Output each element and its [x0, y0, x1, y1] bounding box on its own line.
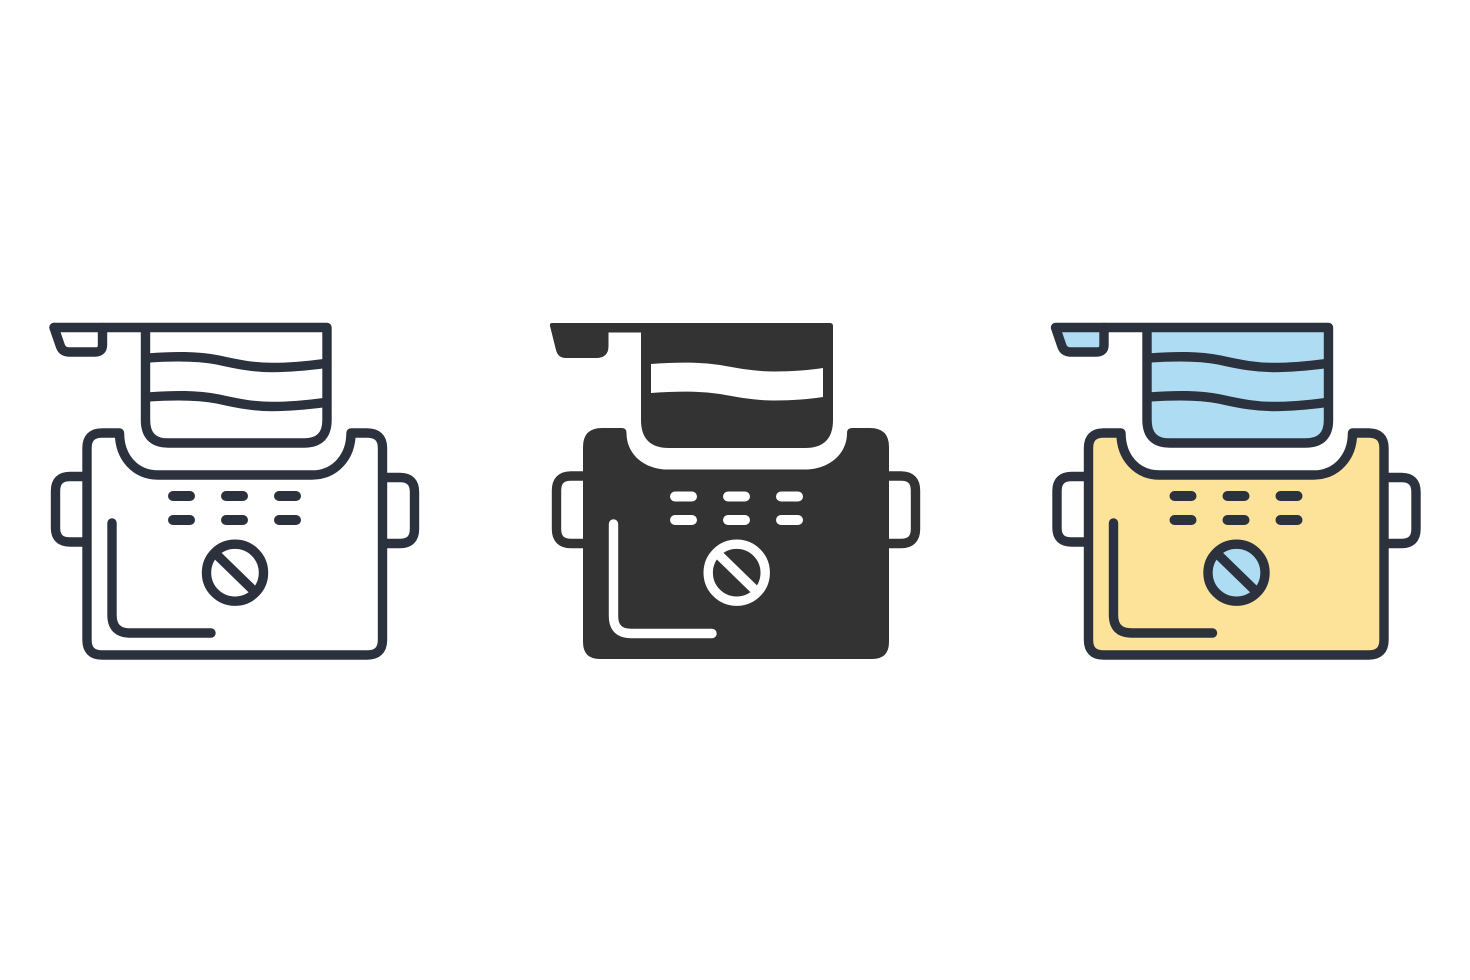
vents	[1174, 496, 1298, 520]
right ear	[385, 478, 414, 544]
icon: outline deep fryer	[54, 328, 414, 655]
left ear	[1057, 476, 1086, 542]
right ear	[1386, 478, 1416, 544]
body highlight line	[112, 523, 211, 633]
basket waves	[148, 357, 325, 406]
fryer basket	[54, 328, 327, 443]
body highlight line	[614, 524, 712, 634]
fryer basket handle	[54, 328, 102, 352]
liquid band	[651, 363, 823, 400]
fryer body	[87, 433, 382, 655]
icon: solid deep fryer	[550, 323, 916, 659]
control knob	[708, 544, 765, 601]
vents	[173, 496, 296, 520]
right ear	[885, 476, 916, 544]
icon: coloured deep fryer	[1056, 328, 1416, 655]
vents	[675, 496, 798, 520]
control knob	[1208, 544, 1265, 601]
left ear	[556, 476, 590, 544]
basket waves	[1150, 357, 1326, 406]
fryer body	[583, 428, 889, 659]
left ear	[56, 476, 85, 542]
fryer body	[1088, 433, 1384, 655]
control knob	[206, 544, 264, 601]
fryer basket	[1104, 328, 1328, 443]
fryer basket with handle	[550, 323, 833, 448]
fryer basket handle	[1056, 328, 1104, 352]
body highlight line	[1114, 523, 1212, 633]
